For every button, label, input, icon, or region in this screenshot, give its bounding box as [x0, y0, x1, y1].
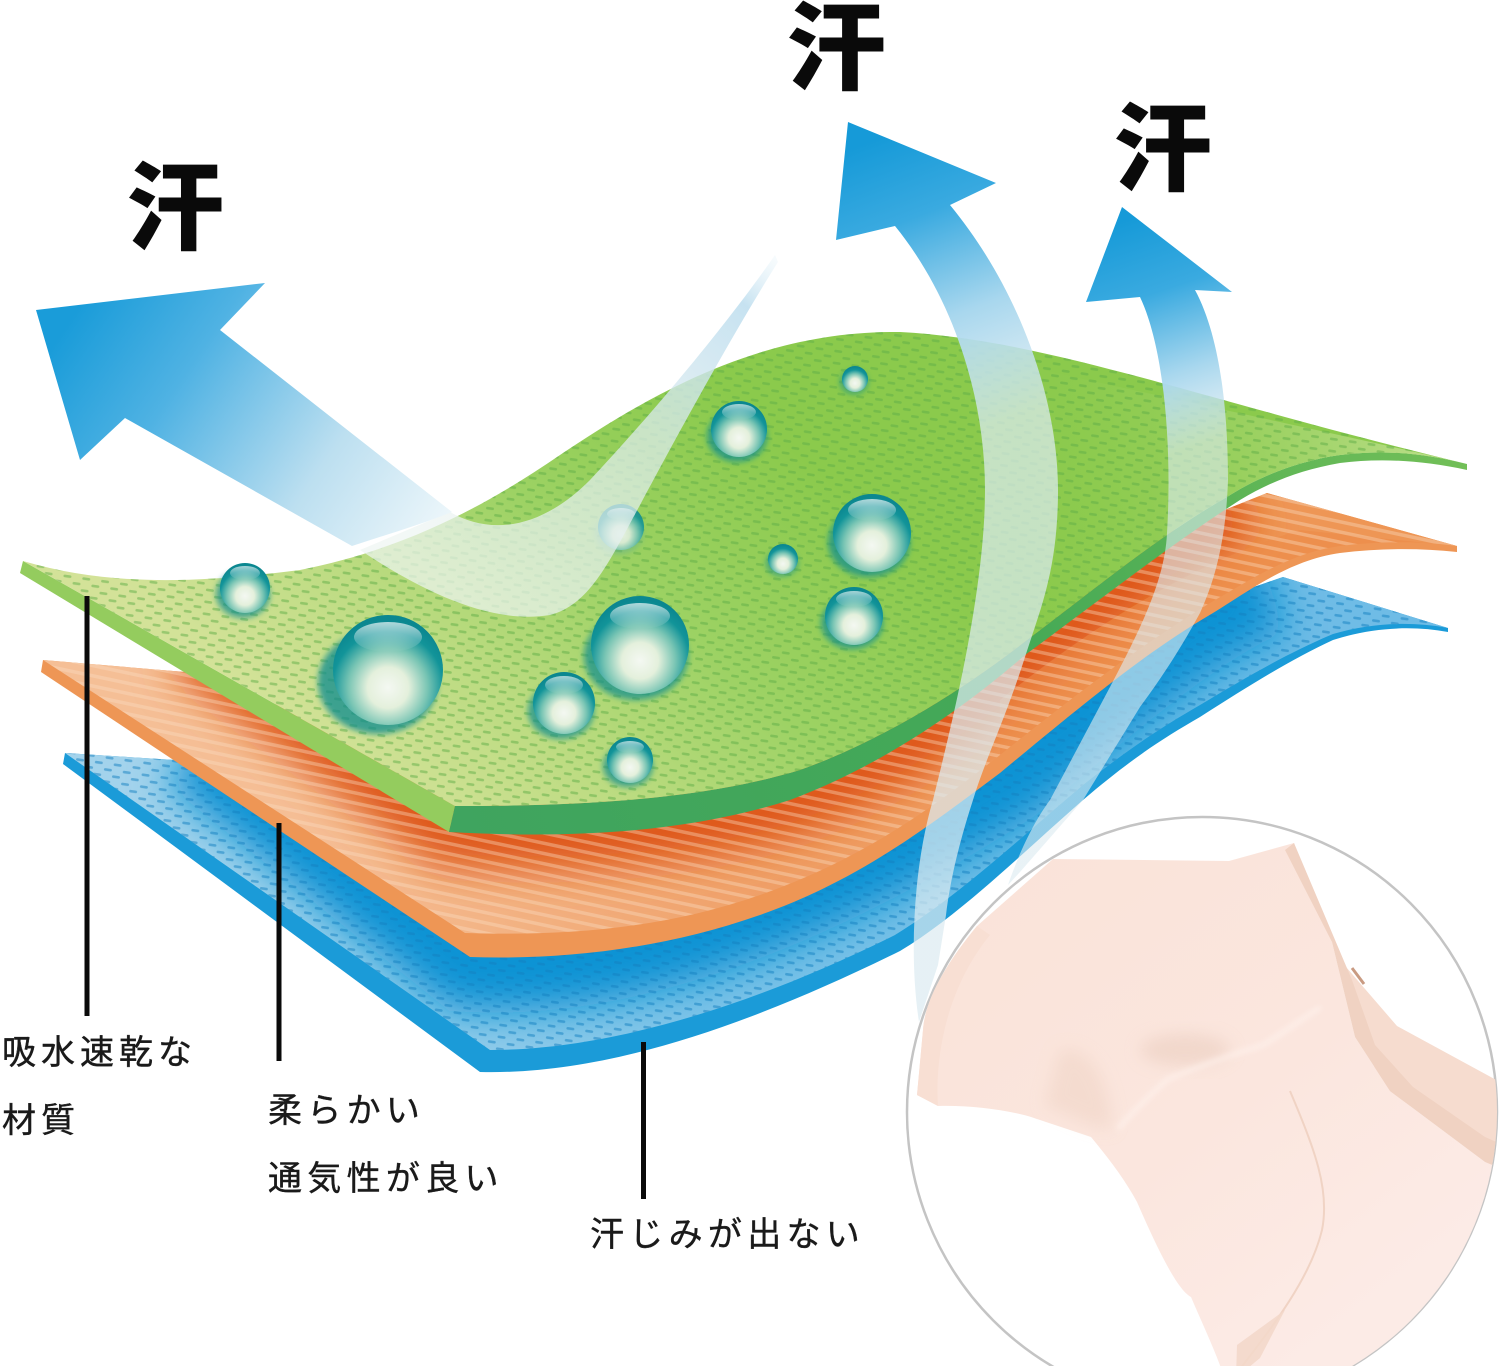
callout text: orange layer: 柔らかい	[268, 1092, 425, 1130]
droplet 6	[595, 504, 644, 554]
arrow: left sweat arrow	[36, 255, 778, 617]
inset circle: garment photo	[907, 817, 1500, 1366]
callout text: orange layer	[268, 1092, 504, 1198]
garment body	[917, 843, 1500, 1366]
droplet 2	[318, 615, 443, 734]
droplet 4	[528, 672, 595, 739]
callout text: blue layer: 汗じみが出ない	[590, 1216, 865, 1254]
collar tag	[1352, 968, 1364, 984]
droplet 1	[216, 563, 270, 618]
arrow: centre sweat arrow	[836, 122, 1058, 1022]
sweat kanji: left: 汗	[126, 156, 224, 263]
callout text: orange layer: 通気性が良い	[268, 1160, 504, 1198]
callout leader lines	[84, 596, 646, 1199]
garment inner back neck	[1347, 968, 1497, 1162]
droplet 7	[707, 401, 767, 462]
gusset stitching	[1280, 1090, 1325, 1314]
lower gusset shadow	[1236, 1310, 1285, 1366]
droplet 10	[766, 544, 798, 576]
sweat kanji: right: 汗	[1113, 97, 1212, 204]
green top fabric layer	[20, 332, 1467, 834]
droplet 3	[584, 596, 689, 700]
blue bottom fabric layer	[63, 577, 1448, 1072]
droplet 8	[840, 366, 868, 394]
droplet 5	[603, 737, 653, 787]
garment neckline binding	[1285, 843, 1500, 1172]
callout text: green layer: 材質	[2, 1102, 80, 1140]
callout text: green layer: 吸水速乾な	[2, 1034, 197, 1072]
droplet 11	[821, 587, 883, 649]
panel fold highlight	[1178, 1054, 1237, 1076]
arrow: right sweat arrow	[1008, 207, 1232, 885]
droplet 9	[828, 494, 911, 577]
underarm fold shadow	[1140, 1034, 1230, 1066]
water droplets	[216, 366, 911, 787]
sleeve hem shading	[917, 926, 977, 1106]
orange middle fabric layer	[41, 493, 1457, 958]
fold shadow	[1050, 1054, 1108, 1124]
callout text: green layer	[2, 1034, 197, 1140]
